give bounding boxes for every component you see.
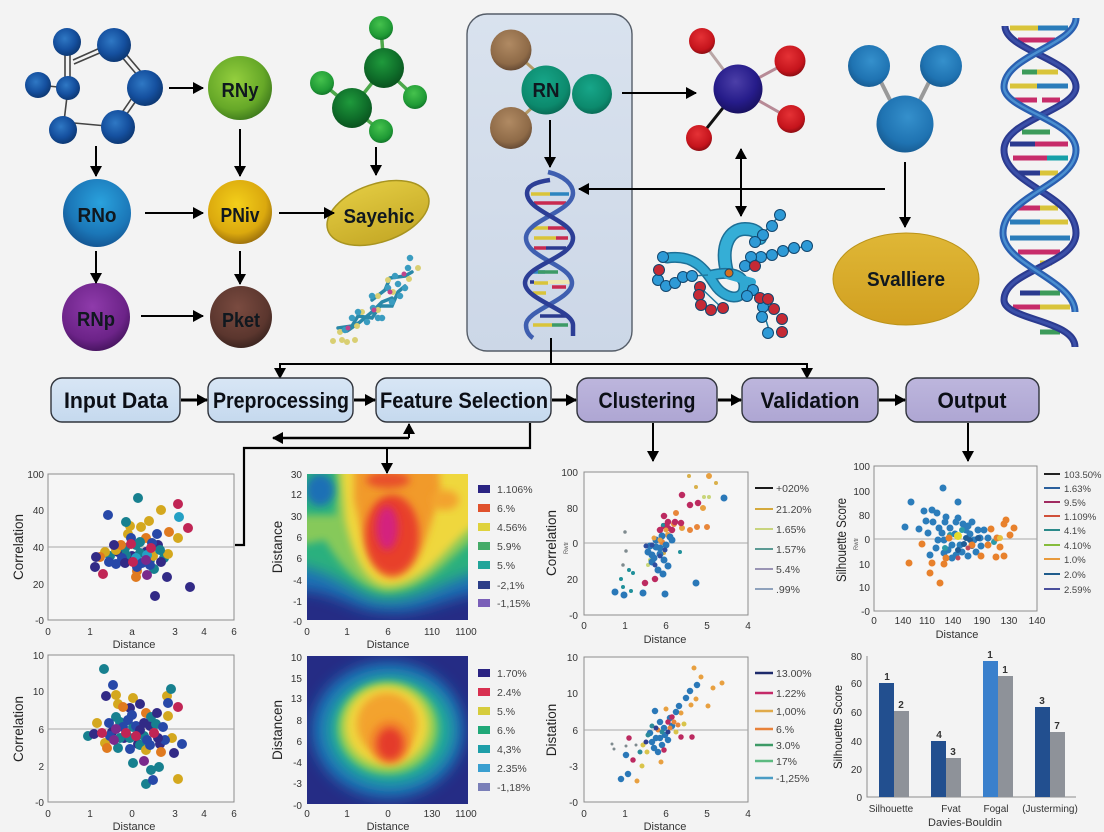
chart: scatter A: a: [129, 627, 135, 638]
legend: scatter D: 1,00%: [776, 706, 806, 718]
chart: heatmap B: 6: [296, 737, 302, 748]
legend: scatter E: 1.0%: [1064, 555, 1086, 566]
icon: blue three-atom molecule: [848, 45, 962, 152]
arrows: between pipeline steps: [181, 398, 905, 402]
legend: scatter D: 6.%: [776, 724, 794, 736]
chart: scatter C: 80: [567, 504, 578, 515]
step: Output: Output: [938, 388, 1007, 413]
legend: scatter C: .99%: [776, 584, 800, 596]
node: RNo: RNo: [78, 205, 116, 227]
chart: scatter E: 10: [859, 583, 870, 594]
legend: scatter D: [755, 668, 812, 785]
icon: large DNA helix: [1003, 18, 1076, 347]
arrows: left pathway: [96, 88, 376, 316]
chart: scatter A: 0: [45, 627, 51, 638]
legend: scatter C: 1.57%: [776, 544, 806, 556]
legend: scatter E: 1.109%: [1064, 512, 1097, 523]
chart: scatter E: 110: [919, 616, 935, 627]
legend: scatter E: [1044, 470, 1102, 596]
chart: heatmap B: [270, 653, 477, 832]
chart: scatter D: Distation: [544, 704, 559, 756]
icon: RN molecule: RN: [532, 80, 560, 102]
legend: heatmap B: [478, 668, 530, 794]
legend: heatmap B: 2.35%: [497, 763, 527, 775]
chart: scatter B: 4: [201, 809, 207, 820]
legend: scatter C: +020%: [776, 483, 809, 495]
chart: bar chart of validation scores: 0: [856, 793, 862, 804]
chart: scatter B: 10: [33, 687, 44, 698]
arrows: pipeline to charts: [235, 423, 968, 545]
bars: Silhouette: 2: [898, 700, 904, 711]
node: Svalliere: Svalliere: [867, 269, 945, 291]
step: Input Data: [51, 378, 180, 422]
chart: scatter B: 6: [38, 725, 44, 736]
legend: heatmap A: -2,1%: [497, 580, 524, 592]
chart: scatter E: 0: [864, 535, 870, 546]
flow connector: DNA box to pipeline: [280, 338, 807, 378]
icon: RN molecule: [490, 30, 612, 149]
chart: scatter C: 6: [663, 621, 669, 632]
legend: heatmap A: 5.9%: [497, 541, 521, 553]
node: PNiv: [208, 180, 272, 244]
chart: scatter D: -3: [569, 762, 578, 773]
chart: bar chart of validation scores: Silhouette: [869, 804, 914, 815]
chart: bar chart of validation scores: 20: [851, 765, 862, 776]
chart: scatter C: [544, 468, 751, 646]
chart: scatter A: Distance: [113, 639, 155, 651]
legend: heatmap B: -1,18%: [497, 782, 530, 794]
chart: heatmap A: 30: [291, 470, 302, 481]
chart: heatmap B: 8: [296, 716, 302, 727]
legend: scatter E: 2.0%: [1064, 570, 1086, 581]
node: Pket: [210, 286, 272, 348]
chart: bar chart of validation scores: Fogal: [983, 804, 1009, 815]
bars: Fogal: 1: [987, 650, 993, 661]
legend: scatter E: 4.1%: [1064, 526, 1086, 537]
legend: scatter E: 1.63%: [1064, 484, 1091, 495]
chart: heatmap B: -4: [293, 758, 302, 769]
chart: heatmap A: 12: [291, 490, 302, 501]
chart: scatter A: 20: [33, 580, 44, 591]
legend: scatter D: -1,25%: [776, 773, 809, 785]
chart: scatter B: [11, 651, 237, 832]
legend: scatter D: 3.0%: [776, 740, 800, 752]
node: RNp: [62, 283, 130, 351]
chart: heatmap A: [272, 471, 476, 648]
icon: green molecule: [310, 16, 427, 143]
legend: heatmap A: [478, 484, 533, 610]
node: RNy: RNy: [222, 80, 259, 102]
chart: bar chart of validation scores: 40: [851, 737, 862, 748]
panel: left molecular pathway: [25, 16, 438, 351]
step: Feature Selection: Feature Selection: [380, 388, 548, 413]
icon: small chain molecule: [333, 258, 418, 342]
chart: scatter D: 10: [567, 653, 578, 664]
node: RNp: RNp: [77, 309, 115, 331]
icon: navy molecule with red atoms: [686, 28, 806, 151]
icon: central DNA helix: [525, 172, 573, 338]
chart: scatter B: 2: [38, 762, 44, 773]
chart: scatter C: Distance: [644, 634, 686, 646]
chart: heatmap B: 1: [344, 809, 350, 820]
chart: scatter E: 140: [945, 616, 962, 627]
legend: heatmap A: -1,15%: [497, 598, 530, 610]
bars: Justerming: 7: [1054, 721, 1060, 732]
legend: scatter C: 5.4%: [776, 564, 800, 576]
chart: scatter E: 0: [871, 616, 877, 627]
chart: heatmap B: Distancen: [270, 700, 285, 760]
step: Output: [906, 378, 1039, 422]
node: Sayehic: Sayehic: [344, 206, 414, 228]
chart: scatter E: Silhouette Score: [834, 498, 849, 582]
chart: scatter A: 40: [33, 543, 44, 554]
legend: scatter E: 4.10%: [1064, 541, 1091, 552]
chart: scatter C: -0: [569, 611, 578, 622]
bars: Fvat: 3: [950, 747, 956, 758]
bars: Fvat: [931, 730, 961, 797]
chart: scatter B: 6: [231, 809, 237, 820]
chart: bar chart of validation scores: Fvat: [941, 804, 961, 815]
node: RNo: [63, 179, 131, 247]
chart: bar chart of validation scores: [831, 650, 1078, 829]
chart: heatmap A: 6: [385, 627, 391, 638]
chart: bar chart of validation scores: 60: [851, 679, 862, 690]
arrows: upper right connections: [579, 93, 905, 227]
chart: scatter E: 190: [974, 616, 991, 627]
arrow: RN to DNA: [549, 120, 551, 167]
chart: scatter C: 5: [704, 621, 710, 632]
chart: scatter D: 6: [663, 809, 669, 820]
chart: scatter E: Rwtr: [854, 538, 860, 550]
chart: scatter E: 10: [859, 560, 870, 571]
chart: scatter E: [834, 462, 1046, 641]
step: Preprocessing: [208, 378, 353, 422]
chart: scatter A: 1: [87, 627, 93, 638]
pipeline: workflow steps: [51, 378, 1039, 422]
legend: scatter D: 1.22%: [776, 688, 806, 700]
chart: scatter B: 1: [87, 809, 93, 820]
chart: heatmap B: 130: [424, 809, 441, 820]
chart: scatter A: 3: [172, 627, 178, 638]
chart: bar chart of validation scores: 60: [851, 708, 862, 719]
chart: scatter E: -0: [861, 607, 870, 618]
chart: scatter C: 4: [745, 621, 751, 632]
chart: heatmap A: 6: [296, 554, 302, 565]
icon: blue ring molecule: [25, 28, 163, 144]
legend: heatmap A: 4.56%: [497, 522, 527, 534]
legend: scatter C: 1.65%: [776, 524, 806, 536]
chart: heatmap B: 0: [304, 809, 310, 820]
chart: bar chart of validation scores: Davies-Bouldin: [928, 817, 1002, 829]
chart: scatter D: -0: [569, 798, 578, 809]
legend: scatter C: 21.20%: [776, 504, 812, 516]
legend: heatmap B: 4,3%: [497, 744, 521, 756]
chart: scatter D: 6: [572, 726, 578, 737]
chart: heatmap A: 0: [304, 627, 310, 638]
chart: scatter A: [11, 470, 237, 651]
chart: scatter B: 10: [33, 651, 44, 662]
chart: heatmap B: 1100: [455, 809, 477, 820]
legend: heatmap A: 5.%: [497, 560, 515, 572]
chart: scatter D: 4: [745, 809, 751, 820]
chart: heatmap B: -3: [293, 779, 302, 790]
chart: bar chart of validation scores: 80: [851, 652, 862, 663]
legend: heatmap B: 6.%: [497, 725, 515, 737]
legend: heatmap B: 2.4%: [497, 687, 521, 699]
chart: scatter D: 1: [622, 809, 628, 820]
legend: scatter E: 103.50%: [1064, 470, 1102, 481]
node: RNy: [208, 56, 272, 120]
chart: scatter B: 0: [129, 809, 135, 820]
chart: heatmap B: 13: [291, 694, 302, 705]
chart: scatter E: 130: [1001, 616, 1018, 627]
chart: scatter E: 100: [853, 462, 870, 473]
chart: scatter B: Correlation: [11, 696, 26, 762]
chart: scatter A: 100: [27, 470, 44, 481]
bars: Justerming: [1035, 696, 1065, 797]
step: Validation: Validation: [760, 388, 860, 413]
node: Svalliere: [833, 233, 979, 325]
chart: scatter C: 0: [572, 539, 578, 550]
chart: scatter A: -0: [35, 616, 44, 627]
chart: scatter B: -0: [35, 798, 44, 809]
chart: heatmap B: 0: [385, 809, 391, 820]
chart: scatter B: 0: [45, 809, 51, 820]
legend: heatmap B: 1.70%: [497, 668, 527, 680]
chart: scatter D: 5: [704, 809, 710, 820]
chart: heatmap A: 30: [291, 512, 302, 523]
bars: Silhouette: 1: [884, 672, 890, 683]
chart: scatter C: 20: [567, 575, 578, 586]
chart: scatter C: Correlation: [544, 510, 559, 576]
chart: scatter C: 100: [561, 468, 578, 479]
chart: bar chart of validation scores: Silhouette Score: [831, 685, 845, 769]
bars: Silhouette: [879, 672, 909, 797]
chart: scatter D: 10: [567, 689, 578, 700]
chart: scatter A: 6: [231, 627, 237, 638]
chart: scatter C: Rwtr: [564, 542, 570, 554]
chart: heatmap B: 15: [291, 674, 302, 685]
legend: scatter E: 9.5%: [1064, 498, 1086, 509]
bars: Fogal: 1: [1002, 665, 1008, 676]
chart: bar chart of validation scores: (Justerming): [1022, 804, 1078, 815]
chart: scatter B: 3: [172, 809, 178, 820]
legend: scatter C: [755, 483, 812, 596]
chart: scatter E: 80: [859, 511, 870, 522]
chart: heatmap B: 10: [291, 653, 302, 664]
icon: protein ribbon with beads: [652, 210, 812, 338]
chart: heatmap A: -0: [293, 617, 302, 628]
chart: heatmap A: -1: [293, 597, 302, 608]
legend: heatmap A: 6.%: [497, 503, 515, 515]
legend: scatter D: 17%: [776, 756, 797, 768]
chart: heatmap A: 1100: [455, 627, 477, 638]
chart: scatter A: Correlation: [11, 514, 26, 580]
panel: central RN and DNA box: [467, 14, 632, 351]
chart: heatmap A: -4: [293, 576, 302, 587]
step: Validation: [742, 378, 878, 422]
chart: heatmap A: 1: [344, 627, 350, 638]
legend: heatmap B: 5.%: [497, 706, 515, 718]
chart: scatter C: 0: [581, 621, 587, 632]
bars: Justerming: 3: [1039, 696, 1045, 707]
bars: Fvat: 4: [936, 730, 942, 741]
chart: scatter E: 140: [1029, 616, 1046, 627]
chart: scatter C: 1: [622, 621, 628, 632]
chart: heatmap A: Distance: [270, 521, 285, 573]
step: Feature Selection: [376, 378, 551, 422]
chart: scatter E: 140: [895, 616, 912, 627]
chart: scatter A: 4: [201, 627, 207, 638]
step: Clustering: [577, 378, 717, 422]
chart: scatter D: 0: [581, 809, 587, 820]
chart: heatmap A: Distance: [367, 639, 409, 651]
node: Sayehic: [318, 168, 438, 258]
chart: heatmap A: 110: [424, 627, 440, 638]
chart: scatter E: 100: [853, 487, 870, 498]
node: PNiv: PNiv: [220, 205, 260, 227]
chart: heatmap B: -0: [293, 801, 302, 812]
chart: scatter A: 40: [33, 506, 44, 517]
chart: scatter D: [544, 653, 751, 832]
step: Preprocessing: Preprocessing: [213, 388, 349, 413]
chart: scatter E: Distance: [936, 629, 978, 641]
step: Input Data: Input Data: [64, 388, 169, 413]
legend: heatmap A: 1.106%: [497, 484, 533, 496]
legend: scatter D: 13.00%: [776, 668, 812, 680]
bars: Fogal: [983, 650, 1013, 797]
node: Pket: Pket: [222, 310, 260, 332]
step: Clustering: Clustering: [598, 388, 696, 413]
legend: scatter E: 2.59%: [1064, 585, 1091, 596]
chart: heatmap A: 6: [296, 533, 302, 544]
